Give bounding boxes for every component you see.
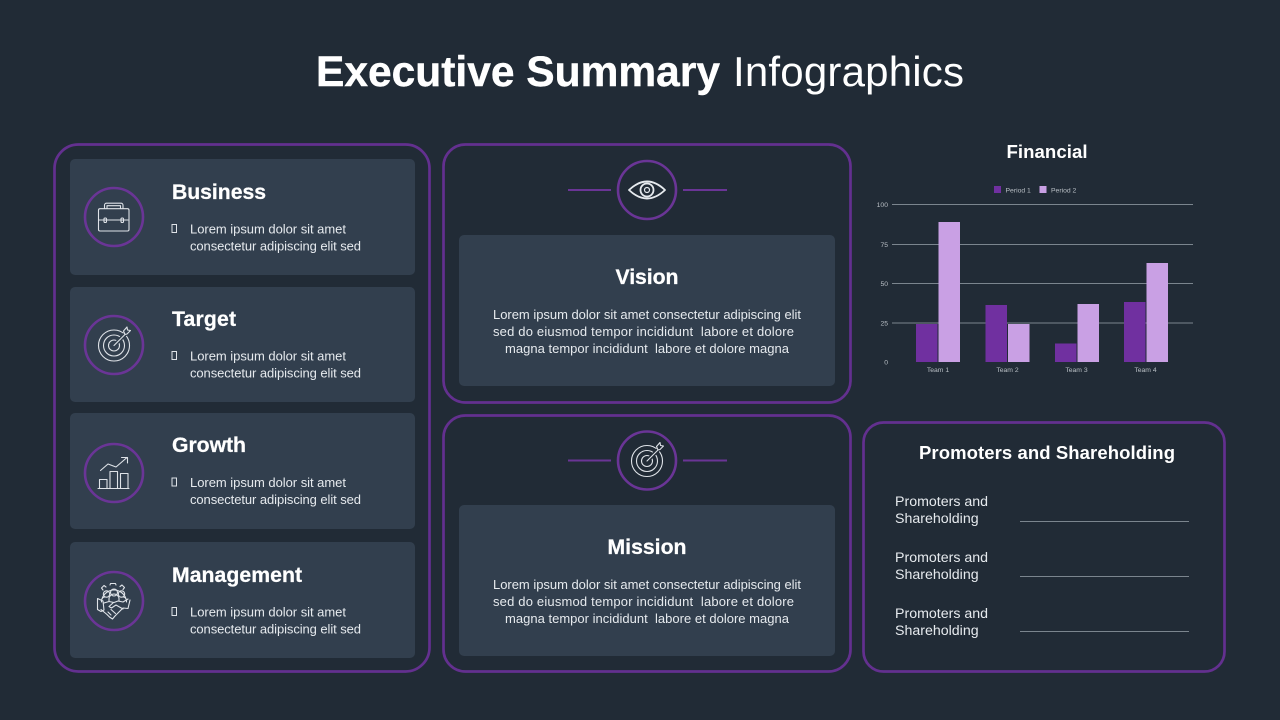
axis labels: Team 2 <box>996 367 1019 374</box>
card: Target <box>70 287 415 402</box>
axis labels: 75 <box>880 242 888 249</box>
card: Growth <box>70 413 415 529</box>
heading: Promoters and Shareholding: Promoters and Shareholding <box>919 442 1175 463</box>
card: Vision text: magna tempor incididunt labore et dolore magna <box>505 341 790 356</box>
text: Management body: Lorem ipsum dolor sit amet <box>190 604 346 620</box>
heading: Management: Management <box>172 564 302 587</box>
card: Vision text: Vision <box>616 266 678 289</box>
card: Mission text: sed do eiusmod tempor incididunt labore et dolore <box>493 594 794 609</box>
heading: Business: Business <box>172 181 266 204</box>
heading: Growth: Growth <box>172 434 246 457</box>
card: Mission text: Lorem ipsum dolor sit amet consectetur adipiscing elit <box>493 577 801 592</box>
text: Management body: consectetur adipiscing elit sed <box>190 622 361 636</box>
title: Infographics <box>733 48 964 95</box>
axis labels <box>877 202 1157 374</box>
icon: growth chart <box>85 444 143 502</box>
row 3 <box>895 606 1189 639</box>
text: Growth body <box>172 475 361 507</box>
bars: Period 1 <box>916 302 1146 362</box>
card: Vision text: sed do eiusmod tempor incididunt labore et dolore <box>493 324 794 339</box>
row 2 <box>895 550 1189 583</box>
axis labels: 25 <box>880 320 888 328</box>
panel: Vision <box>444 144 850 402</box>
row 1 <box>895 494 1189 527</box>
bars: Period 2 <box>938 222 1168 362</box>
axis labels: 0 <box>884 360 888 366</box>
panel: Promoters and Shareholding <box>864 422 1224 672</box>
text: Business body: Lorem ipsum dolor sit amet <box>190 222 346 236</box>
icon: eye with connector lines <box>568 161 727 219</box>
axis labels: Team 3 <box>1065 367 1088 374</box>
heading: Financial: Financial <box>1006 141 1088 162</box>
title: Executive Summary <box>316 49 720 96</box>
legend: Period 1 <box>1006 188 1031 194</box>
card: Vision text: Lorem ipsum dolor sit amet consectetur adipiscing elit <box>493 307 801 322</box>
row 3: Shareholding <box>895 623 979 639</box>
row 2: Promoters and <box>895 550 988 566</box>
card: Mission text: Mission <box>608 536 686 559</box>
bar chart: Financial <box>877 186 1193 374</box>
card: Mission text <box>459 505 835 656</box>
axis labels: 100 <box>877 202 888 209</box>
card: Management <box>70 542 415 658</box>
icon: target with connector lines <box>568 432 727 490</box>
axis labels: 50 <box>880 281 888 288</box>
text: Growth body: Lorem ipsum dolor sit amet <box>190 475 346 490</box>
axis labels: Team 1 <box>927 367 949 374</box>
row 2: Shareholding <box>895 567 979 583</box>
text: Target body: Lorem ipsum dolor sit amet <box>190 348 346 364</box>
row 1: Promoters and <box>895 494 988 510</box>
card: Business <box>70 159 415 275</box>
text: Business body: consectetur adipiscing elit sed <box>190 238 361 254</box>
panel: Mission <box>444 416 850 672</box>
row 1: Shareholding <box>895 511 979 527</box>
card: Mission text: magna tempor incididunt labore et dolore magna <box>505 611 790 626</box>
heading: Target: Target <box>172 308 236 331</box>
text: Business body <box>172 222 361 254</box>
text: Target body: consectetur adipiscing elit sed <box>190 366 361 380</box>
text: Management body <box>172 604 361 636</box>
title <box>316 48 964 96</box>
icon: handshake and gear <box>85 572 143 630</box>
panel: left business areas <box>54 144 430 672</box>
legend <box>994 186 1077 194</box>
icon: briefcase <box>85 188 143 246</box>
axis labels: Team 4 <box>1134 367 1157 374</box>
row 3: Promoters and <box>895 606 988 622</box>
icon: target <box>85 316 143 374</box>
text: Target body <box>172 348 361 380</box>
card: Vision text <box>459 235 835 386</box>
legend: Period 2 <box>1051 188 1077 194</box>
text: Growth body: consectetur adipiscing elit sed <box>190 492 361 507</box>
